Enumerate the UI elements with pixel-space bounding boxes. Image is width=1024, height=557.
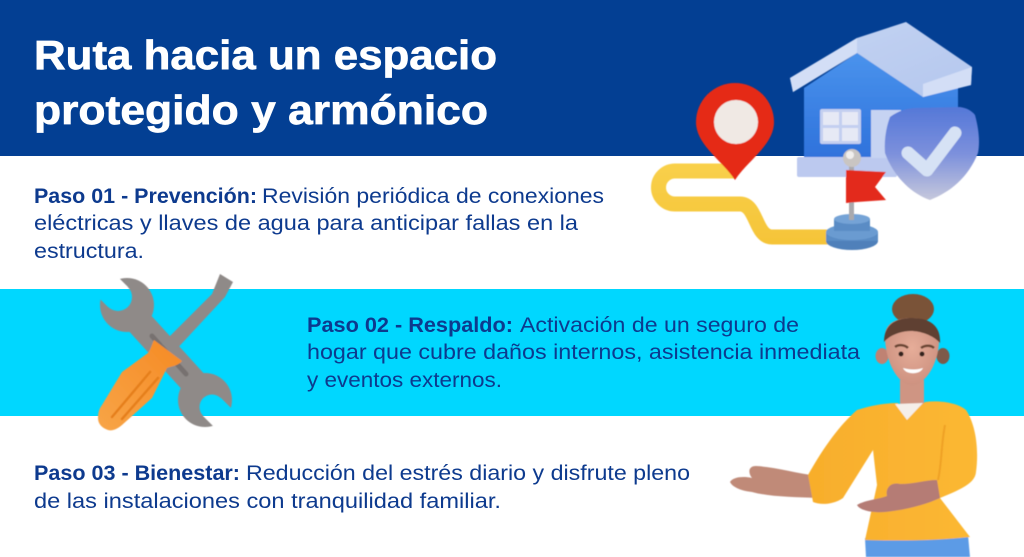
text block: paso 01: Paso 01 - Prevención: <box>34 185 257 208</box>
title <box>34 32 497 133</box>
text block: paso 03: de las instalaciones con tranquilidad familiar. <box>34 490 501 513</box>
house <box>790 22 972 177</box>
route path <box>658 171 835 237</box>
text block: paso 03: Reducción del estrés diario y disfrute pleno <box>246 462 690 485</box>
text block: paso 02: hogar que cubre daños internos, asistencia inmediata <box>307 341 860 364</box>
location pin <box>696 83 774 180</box>
header band <box>0 0 1024 156</box>
text block: paso 02: Activación de un seguro de <box>520 314 799 337</box>
icon: crossed wrench and screwdriver <box>98 274 233 430</box>
text block: paso 01: Revisión periódica de conexiones <box>262 185 604 208</box>
text block: paso 01: estructura. <box>34 240 144 263</box>
text block: paso 03: Paso 03 - Bienestar: <box>34 462 240 485</box>
text block: paso 02: Paso 02 - Respaldo: <box>307 314 513 337</box>
left hand <box>730 466 818 498</box>
right hand <box>857 480 940 512</box>
step 2 band <box>0 289 1024 416</box>
text block: paso 03 <box>34 462 690 513</box>
text block: paso 01: eléctricas y llaves de agua para anticipar fallas en la <box>34 212 578 235</box>
text block: paso 01 <box>34 185 604 263</box>
text block: paso 02: y eventos externos. <box>307 369 502 392</box>
jeans <box>865 535 970 557</box>
head <box>876 294 950 385</box>
neck <box>900 380 924 408</box>
shield <box>885 107 979 200</box>
icon: house with route, pin, flag and shield <box>658 22 979 250</box>
title: Ruta hacia un espacio <box>34 32 497 78</box>
screwdriver <box>98 274 233 430</box>
icon: woman presenting <box>730 294 977 557</box>
title: protegido y armónico <box>34 87 488 133</box>
wrench <box>100 278 232 427</box>
flag on base <box>826 149 886 250</box>
sweater <box>808 401 977 541</box>
text block: paso 02 <box>307 314 860 392</box>
